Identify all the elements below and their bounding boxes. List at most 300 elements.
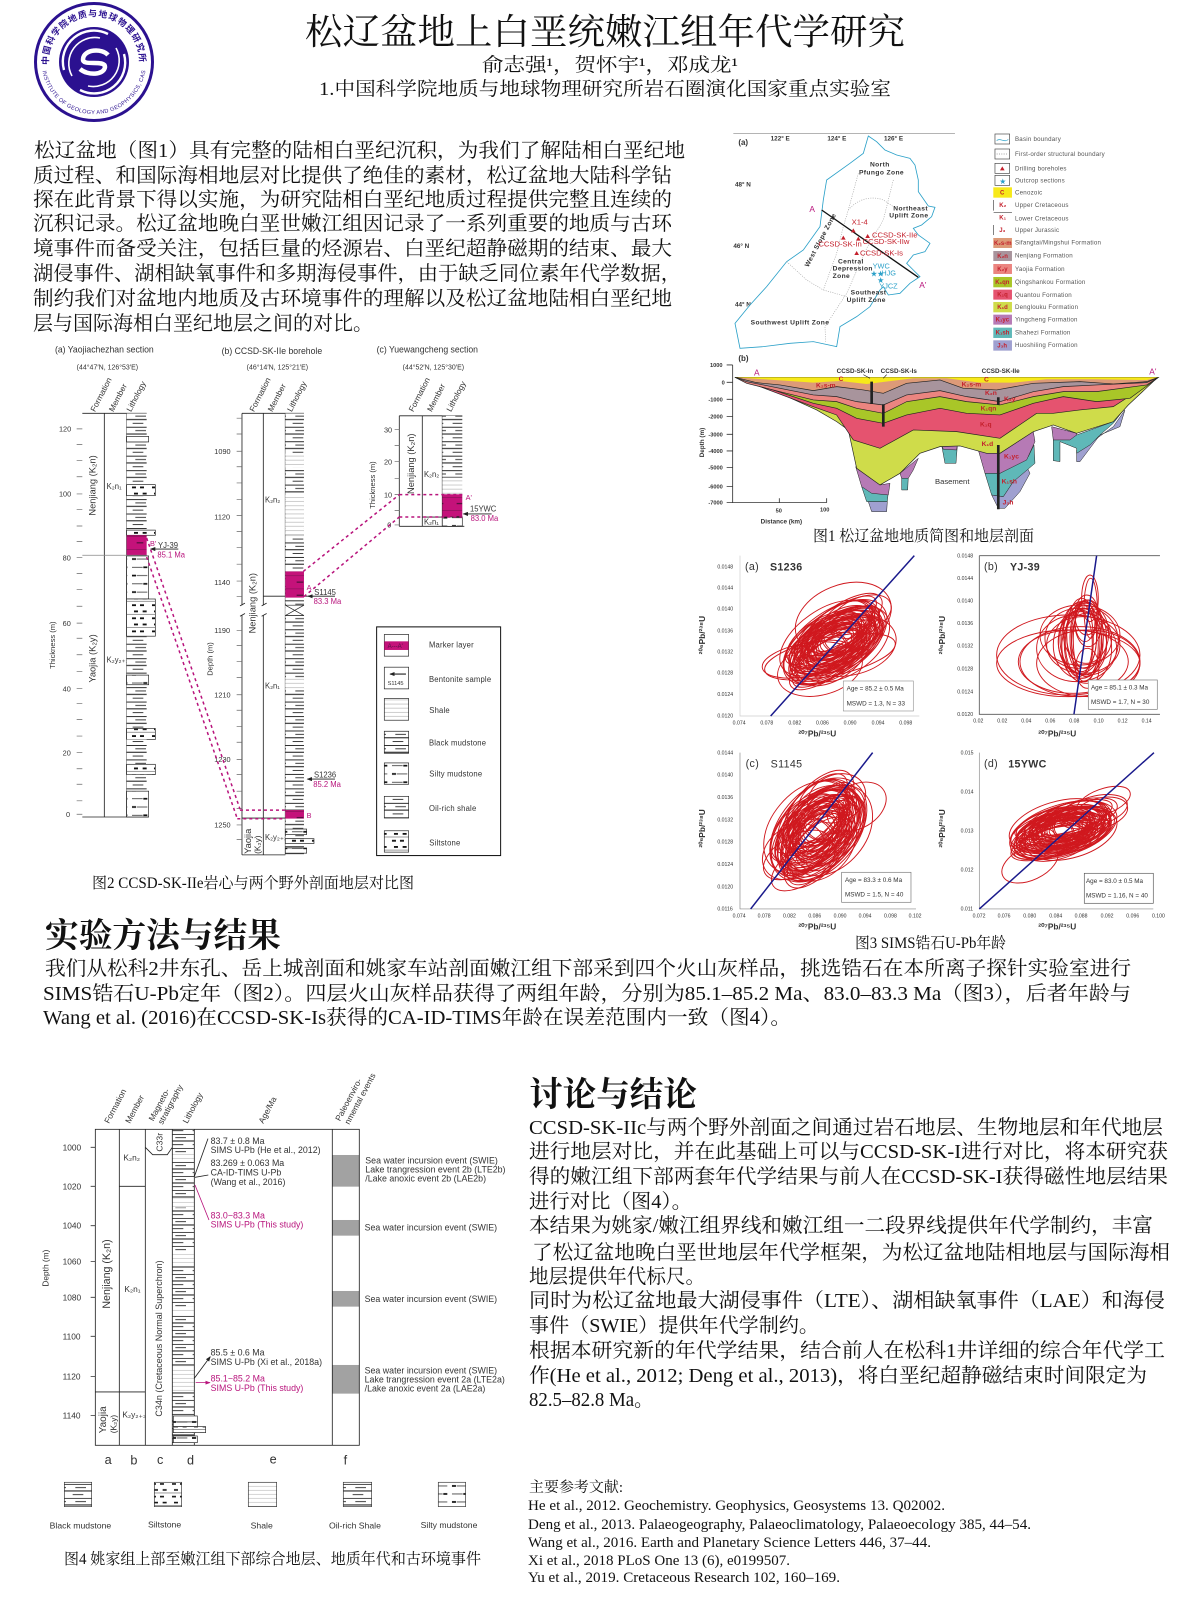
logo text: English name: INSTITUTE OF GEOLOGY AND GEOPHYSICS, CAS [42, 70, 146, 114]
discussion paragraphs: 进行地层对比，并在此基础上可以与CCSD-SK-I进行对比，将本研究获 [529, 1140, 1168, 1163]
discussion paragraphs: 作(He et al., 2012; Deng et al., 2013)，将白垩纪超静磁结束时间限定为 [529, 1364, 1147, 1387]
map legend: Denglouku Formation [1015, 304, 1079, 311]
plot d: 15YWC: (d) [984, 758, 998, 770]
section a: Yaojiachezhan: K₂n₁ [107, 482, 122, 491]
legend box: Marker layer [429, 640, 474, 650]
discussion paragraphs [529, 1116, 1170, 1411]
plot b: YJ-39: 0.04 [1021, 719, 1031, 725]
map a: YJCZ [879, 282, 898, 291]
age annotations: 83.7 ± 0.8 Ma [211, 1136, 265, 1146]
figure 4: composite stratigraphy: 1140 [63, 1411, 81, 1421]
plot c: S1145: S1145 [771, 758, 802, 770]
section a: Yaojiachezhan: YJ-39 [158, 541, 178, 550]
discussion paragraphs: 82.5–82.8 Ma。 [529, 1389, 653, 1411]
logo text: Chinese name: 中国科学院地质与地球物理研究所 [41, 9, 147, 64]
section b: CCSD-SK-IIe borehole: (46°14′N, 125°21′E) [247, 363, 308, 371]
plot a: S1236: ²⁰⁷Pb/²³⁵U [798, 729, 836, 739]
map legend: K₁sh [996, 331, 1010, 337]
plot c: S1145: 0.0132 [717, 817, 733, 823]
section c: Yuewangcheng: Lithology [445, 379, 468, 413]
legend box: Bentonite sample [429, 675, 491, 684]
geological section b: K₂s-m [962, 382, 981, 389]
map a: Northeast [893, 205, 928, 212]
geological section b: (b) [738, 354, 749, 363]
map legend: Yaojia Formation [1015, 266, 1065, 273]
map legend: C [1000, 191, 1005, 197]
map a: Central [838, 258, 864, 265]
plot b: YJ-39: 0.02 [997, 719, 1007, 725]
deep basement units [856, 406, 1127, 512]
plot d: 15YWC: 0.011 [961, 907, 973, 913]
plot d: 15YWC: 0.012 [961, 868, 974, 874]
age annotations: CA-ID-TIMS U-Pb [211, 1167, 281, 1177]
map legend: Quantou Formation [1015, 292, 1072, 299]
age annotations: SIMS U-Pb (Xi et al., 2018a) [211, 1357, 322, 1367]
age annotations: 83.269 ± 0.063 Ma [211, 1158, 284, 1168]
map a: CCSD-SK-IIe [872, 231, 918, 240]
plot b: YJ-39: Age = 85.1 ± 0.3 Ma [1091, 685, 1149, 692]
figure 4: composite stratigraphy: Magneto- [146, 1087, 172, 1123]
event labels: Lake trangression event 2a (LTE2a) [365, 1375, 505, 1385]
figure 3 caption: 图3 SIMS锆石U-Pb年龄 [855, 933, 1006, 952]
map legend: Basin boundary [1015, 136, 1062, 143]
logo: institute emblem [34, 2, 154, 122]
figure 2: stratigraphic correlation [48, 345, 501, 856]
map legend: Outcrop sections [1015, 178, 1065, 185]
map a: 122° E [771, 135, 790, 143]
map a: Southwest Uplift Zone [751, 320, 829, 327]
plot c: S1145: ²⁰⁷Pb/²³⁵U [798, 922, 836, 932]
discussion paragraphs: 本结果为姚家/嫩江组界线和嫩江组一二段界线提供年代学制约，丰富 [529, 1214, 1153, 1237]
plot b: YJ-39: 0.08 [1069, 719, 1079, 725]
plot a: S1236: 0.0144 [717, 585, 733, 591]
geological section b: 0 [722, 380, 725, 386]
section c: Yuewangcheng: 10 [384, 490, 392, 499]
geological section b: A' [1149, 367, 1157, 377]
map legend: Lower Cretaceous [1015, 216, 1069, 223]
bottom lithology legend: Oil-rich Shale [329, 1521, 381, 1531]
figure 4: composite stratigraphy: stratigraphy [156, 1082, 185, 1126]
event labels: /Lake anoxic event 2a (LAE2a) [365, 1384, 485, 1394]
section a: Yaojiachezhan: 85.1 Ma [157, 551, 186, 560]
figure 4: composite stratigraphy: Depth (m) [41, 1249, 51, 1287]
introduction paragraph: 探在此背景下得以实施，为研究陆相白垩纪地质过程提供完整且连续的 [33, 188, 672, 211]
map legend: K₁q [997, 293, 1008, 299]
geological section b: -7000 [708, 501, 723, 507]
bottom lithology legend: Shale [251, 1521, 273, 1531]
figure 4: composite stratigraphy: C33r [155, 1133, 165, 1152]
section a: Yaojiachezhan: 80 [63, 553, 71, 562]
bottom lithology legend [50, 1482, 478, 1531]
geological section b: K₁d [982, 441, 993, 448]
figure 1 caption: 图1 松辽盆地地质简图和地层剖面 [813, 526, 1034, 545]
plot c: S1145: ²⁰⁶Pb/²³⁸U [697, 809, 707, 848]
plot c: S1145: 0.098 [884, 913, 897, 919]
geological section b: K₁q [980, 422, 992, 429]
figure 3: concordia plots [697, 553, 1165, 932]
map legend: Qingshankou Formation [1015, 279, 1086, 286]
references: Deng et al., 2013. Palaeogeography, Palaeoclimatology, Palaeoecology 385, 44–54. [528, 1517, 1031, 1533]
geological section b: -6000 [708, 485, 723, 491]
section b: CCSD-SK-IIe borehole: 1120 [214, 512, 230, 521]
section b: CCSD-SK-IIe borehole: 1190 [214, 626, 230, 635]
references: 主要参考文献: [529, 1479, 623, 1496]
plot d: 15YWC: MSWD = 1.16, N = 40 [1086, 893, 1148, 900]
figure 4: composite stratigraphy: K₂n₂ [123, 1153, 140, 1163]
plot b: YJ-39: 0.02 [973, 719, 983, 725]
frame and columns [95, 1129, 359, 1445]
discussion paragraphs: 了松辽盆地晚白垩世地层年代学框架，为松辽盆地陆相地层与国际海相 [532, 1241, 1170, 1264]
figure 4: composite stratigraphy: 1000 [63, 1143, 82, 1153]
section b: CCSD-SK-IIe borehole: K₂n₂ [265, 495, 280, 505]
plot a: S1236: ²⁰⁶Pb/²³⁸U [697, 616, 707, 654]
section a: Yaojiachezhan: 100 [59, 490, 71, 499]
plot b: YJ-39: 0.06 [1045, 719, 1055, 725]
figure 4: composite stratigraphy: e [270, 1452, 277, 1466]
plot a: S1236: 0.0140 [717, 607, 733, 613]
map a: CCSD-SK-In [818, 239, 862, 248]
map a: A' [919, 280, 927, 290]
plot b: YJ-39: 0.0128 [957, 667, 973, 673]
map legend: Upper Jurassic [1015, 227, 1059, 234]
methods paragraph: 我们从松科2井东孔、岳上城剖面和姚家车站剖面嫩江组下部采到四个火山灰样品，挑选锆石在本所离子探针实验室进行 [45, 957, 1131, 980]
plot c: S1145: Age = 83.3 ± 0.6 Ma [845, 877, 903, 884]
geological section b: J₃h [1003, 499, 1013, 506]
strata layers [735, 377, 1158, 485]
map a: Depression [833, 266, 873, 273]
plot a: S1236: 0.094 [872, 721, 885, 727]
map legend [993, 134, 1106, 351]
map legend: K₁yc [996, 318, 1010, 324]
map a: HJG [881, 269, 896, 278]
section b: CCSD-SK-IIe borehole: Depth (m) [206, 642, 215, 676]
plot d: 15YWC: 0.088 [1075, 913, 1088, 919]
plot c: S1145 [697, 750, 922, 932]
discussion paragraphs: 事件（SWIE）提供年代学制约。 [529, 1314, 819, 1337]
geological section b: -4000 [708, 449, 723, 455]
introduction paragraph: 沉积记录。松辽盆地晚白垩世嫩江组因记录了一系列重要的地质与古环 [33, 212, 673, 235]
magenta correlation lines [147, 495, 465, 819]
section b: CCSD-SK-IIe borehole: Formation [248, 376, 273, 413]
figure 4: composite stratigraphy [41, 1071, 506, 1531]
plot b: YJ-39: MSWD = 1.7, N = 30 [1091, 699, 1150, 706]
map a [733, 133, 955, 348]
plot a: S1236: (a) [745, 561, 759, 573]
event labels: /Lake anoxic event 2b (LAE2b) [365, 1174, 486, 1184]
geological section b: Depth (m) [699, 428, 706, 457]
section b: CCSD-SK-IIe borehole: K₂y₂₊₃ [265, 833, 287, 842]
figure 4: composite stratigraphy: Yaojia [98, 1406, 109, 1433]
section b: CCSD-SK-IIe borehole: Yaojia [243, 828, 253, 854]
section c: Yuewangcheng: 20 [384, 457, 392, 466]
map a: YWC [873, 262, 890, 271]
section b: CCSD-SK-IIe borehole: B [307, 811, 312, 820]
methods paragraph [43, 957, 1131, 1029]
section c: Yuewangcheng: 30 [384, 425, 392, 434]
discussion paragraphs: 得的嫩江组下部两套年代学结果与前人在CCSD-SK-I获得磁性地层结果 [529, 1165, 1168, 1188]
section b: CCSD-SK-IIe borehole: Member [266, 382, 288, 413]
plot d: 15YWC: 0.092 [1101, 913, 1114, 919]
figure 4: composite stratigraphy: b [130, 1454, 137, 1468]
plot a: S1236: 0.0120 [717, 713, 733, 719]
introduction paragraph: 层与国际海相白垩纪地层之间的对比。 [33, 312, 373, 335]
section c: Yuewangcheng: A' [466, 493, 472, 502]
map a: North [870, 162, 890, 169]
section b: CCSD-SK-IIe borehole: 1210 [214, 690, 231, 700]
section a: Yaojiachezhan: Member [107, 382, 129, 413]
legend box: Oil-rich shale [429, 804, 476, 813]
section a: Yaojiachezhan: Lithology [125, 379, 148, 413]
plot b: YJ-39: 0.0144 [957, 576, 973, 582]
map a: A [809, 204, 815, 214]
figure 4: composite stratigraphy: a [105, 1453, 113, 1467]
section c: Yuewangcheng: Thickness (m) [368, 461, 377, 509]
section a: Yaojiachezhan: 20 [63, 748, 71, 757]
section a: Yaojiachezhan: (44°47′N, 126°53′E) [77, 363, 138, 371]
map legend: Upper Cretaceous [1015, 202, 1069, 209]
map a: Pfungo Zone [859, 170, 904, 177]
geological section b: K₂y [1004, 396, 1016, 403]
map a: 44° N [735, 301, 751, 309]
plot a: S1236: 0.082 [788, 721, 801, 727]
geological section b: K₁qn [981, 406, 996, 413]
section b: CCSD-SK-IIe borehole: 85.2 Ma [313, 780, 342, 789]
map legend: First-order structural boundary [1015, 151, 1106, 158]
age annotations: SIMS U-Pb (He et al., 2012) [211, 1145, 321, 1155]
event labels: Sea water incursion event (SWIE) [365, 1155, 498, 1165]
plot c: S1145: 0.094 [859, 913, 872, 919]
legend box [377, 627, 501, 856]
map a: 124° E [827, 135, 846, 143]
plot c: S1145: MSWD = 1.5, N = 40 [845, 892, 904, 899]
geological section b: -3000 [708, 432, 723, 438]
figure 4: composite stratigraphy: K₂y₂₊₃ [122, 1410, 146, 1420]
heading: methods and results: 实验方法与结果 [45, 917, 281, 955]
figure 4: composite stratigraphy: Member [123, 1093, 146, 1125]
map a: ★★ [871, 271, 884, 278]
geological section b: CCSD-SK-In [837, 368, 873, 375]
section c: Yuewangcheng: 83.0 Ma [471, 514, 499, 523]
introduction paragraph: 质过程、和国际海相地层对比提供了绝佳的素材，松辽盆地大陆科学钻 [33, 164, 672, 187]
section c: Yuewangcheng [368, 345, 499, 530]
introduction paragraph: 湖侵事件、湖相缺氧事件和多期海侵事件，由于缺乏同位素年代学数据， [33, 262, 681, 285]
map a: CCSD-SK-IIw [863, 237, 910, 246]
age annotations: SIMS U-Pb (This study) [211, 1383, 303, 1393]
map legend: K₂ [999, 203, 1007, 209]
plot a: S1236: 0.074 [733, 721, 746, 727]
plot a: S1236 [697, 556, 919, 739]
figure 1: geological map and section [699, 133, 1158, 525]
plot d: 15YWC: 0.076 [998, 913, 1011, 919]
geological section b: K₁sh [1002, 478, 1017, 485]
legend box: Silty mudstone [429, 770, 482, 779]
map a: Uplift Zone [889, 213, 928, 220]
figure 4: composite stratigraphy: (K₂y) [108, 1415, 118, 1433]
plot a: S1236: 0.0136 [717, 628, 733, 634]
map a: CCSD-SK-Is [860, 249, 903, 258]
map legend: K₁qn [995, 280, 1010, 286]
figure 4: composite stratigraphy: C34n (Cretaceous Normal Superchron) [154, 1260, 164, 1417]
introduction paragraph: 松辽盆地（图1）具有完整的陆相白垩纪沉积，为我们了解陆相白垩纪地 [34, 139, 685, 162]
map a: 48° N [735, 181, 751, 189]
bottom lithology legend: Siltstone [148, 1520, 181, 1530]
section b: CCSD-SK-IIe borehole: 1140 [214, 578, 230, 587]
geological section b: -1000 [708, 397, 723, 403]
age annotations: 85.5 ± 0.6 Ma [211, 1348, 265, 1358]
map a: X1-4 [852, 218, 869, 227]
plot d: 15YWC: ²⁰⁶Pb/²³⁸U [937, 809, 947, 848]
plot c: S1145: 0.086 [808, 913, 821, 919]
figure 4: composite stratigraphy: nmental events [342, 1071, 378, 1126]
map legend: Huoshiling Formation [1015, 342, 1078, 349]
plot a: S1236: 0.0148 [717, 564, 733, 570]
section a: Yaojiachezhan: Nenjiang (K₂n) [88, 455, 98, 516]
plot b: YJ-39: 0.0120 [957, 712, 973, 718]
section b: CCSD-SK-IIe borehole: S1236 [314, 771, 336, 780]
plot d: 15YWC [937, 750, 1165, 932]
age annotations: 85.1−85.2 Ma [211, 1374, 265, 1384]
plot d: 15YWC: 0.084 [1049, 913, 1062, 919]
geological section b: 50 [776, 509, 782, 515]
section b: CCSD-SK-IIe borehole: S1145 [314, 588, 336, 597]
figure 4: composite stratigraphy: 1040 [63, 1221, 82, 1231]
section c: Yuewangcheng: K₂n₁ [424, 517, 439, 527]
authors: 俞志强¹，贺怀宇¹，邓成龙¹ [482, 54, 738, 76]
plot a: S1236: 0.0128 [717, 671, 733, 677]
map a: Southeast [851, 290, 887, 297]
section c: Yuewangcheng: 0 [387, 521, 391, 530]
plot a: S1236: Age = 85.2 ± 0.5 Ma [847, 686, 904, 693]
section a: Yaojiachezhan: B' [150, 539, 157, 548]
map legend: K₂y [997, 267, 1008, 273]
plot b: YJ-39: 0.0124 [957, 689, 973, 695]
map legend: Shahezi Formation [1015, 330, 1071, 337]
geological section b: K₂n [985, 390, 997, 397]
age annotations: 83.0−83.3 Ma [211, 1210, 265, 1220]
plot b: YJ-39: ²⁰⁶Pb/²³⁸U [937, 616, 947, 654]
legend box: Black mudstone [429, 739, 486, 748]
section b: CCSD-SK-IIe borehole: (K₂y) [254, 835, 263, 854]
plot c: S1145: 0.0128 [717, 840, 733, 846]
plot b: YJ-39: 0.0140 [957, 598, 973, 604]
introduction paragraph [33, 139, 685, 335]
section b: CCSD-SK-IIe borehole: Nenjiang (K₂n) [248, 573, 258, 633]
section b: CCSD-SK-IIe borehole: 1090 [214, 447, 231, 456]
figure 4: composite stratigraphy: Age/Ma [256, 1095, 279, 1125]
geological section b: -5000 [708, 466, 723, 472]
figure 4: composite stratigraphy: c [157, 1453, 163, 1467]
age annotations: SIMS U-Pb (This study) [211, 1220, 303, 1230]
map legend: Cenozoic [1015, 189, 1043, 196]
methods paragraph: Wang et al. (2016)在CCSD-SK-Is获得的CA-ID-TIMS年龄在误差范围内一致（图4）。 [43, 1006, 791, 1029]
geological section b [699, 354, 1158, 525]
plot c: S1145: 0.074 [733, 913, 746, 919]
geological section b: K₂s-m [816, 383, 836, 390]
plot b: YJ-39: ²⁰⁷Pb/²³⁵U [1038, 729, 1076, 739]
plot b: YJ-39: 0.14 [1142, 719, 1152, 725]
section a: Yaojiachezhan: 120 [59, 424, 71, 434]
plot c: S1145: 0.0124 [717, 862, 733, 868]
section c: Yuewangcheng: (c) Yuewangcheng section [377, 345, 478, 355]
plot d: 15YWC: 0.015 [961, 750, 974, 756]
geological section b: Distance (km) [761, 518, 802, 525]
plot a: S1236: 0.0132 [717, 649, 733, 655]
section a: Yaojiachezhan: (a) Yaojiachezhan section [55, 345, 154, 355]
map legend: K₂n [997, 254, 1008, 260]
section c: Yuewangcheng: K₂n₂ [424, 470, 439, 479]
geological section b: C [984, 377, 989, 384]
figure 4: composite stratigraphy: Paleoenviro- [333, 1076, 364, 1123]
section b: CCSD-SK-IIe borehole: Lithology [286, 379, 309, 413]
discussion paragraphs: CCSD-SK-IIc与两个野外剖面之间通过岩石地层、生物地层和年代地层 [529, 1116, 1163, 1139]
plot b: YJ-39 [937, 553, 1160, 739]
event labels: Sea water incursion event (SWIE) [365, 1365, 497, 1375]
references: Wang et al., 2016. Earth and Planetary Science Letters 446, 37–44. [528, 1535, 931, 1551]
geological section b: -2000 [708, 415, 723, 421]
map legend: J₃ [999, 228, 1006, 234]
map a: ★ [877, 277, 884, 284]
section a: Yaojiachezhan: Formation [89, 376, 114, 413]
figure 2 caption: 图2 CCSD-SK-IIe岩心与两个野外剖面地层对比图 [92, 873, 414, 892]
map legend: K₂s-m [994, 241, 1012, 247]
figure 4: composite stratigraphy: 1020 [63, 1181, 82, 1191]
discussion paragraphs: 根据本研究新的年代学结果，结合前人在松科1井详细的综合年代学工 [529, 1339, 1165, 1362]
map a: (a) [738, 138, 748, 147]
title: 松辽盆地上白垩统嫩江组年代学研究 [305, 12, 905, 52]
legend box: Siltstone [429, 838, 460, 848]
plot c: S1145: 0.0120 [717, 884, 733, 890]
figure 4: composite stratigraphy: Lithology [180, 1090, 205, 1125]
plot a: S1236: S1236 [770, 561, 802, 573]
section b: CCSD-SK-IIe borehole: 1230 [214, 755, 231, 764]
plot b: YJ-39: 0.0132 [957, 644, 973, 650]
plot b: YJ-39: 0.12 [1118, 719, 1128, 725]
map legend: Sifangtai/Mingshui Formation [1015, 240, 1102, 247]
map a: Uplift Zone [847, 297, 886, 304]
map a: West Slope Zone [804, 212, 838, 268]
plot c: S1145: 0.090 [834, 913, 847, 919]
event labels [365, 1155, 506, 1394]
plot d: 15YWC: Age = 83.0 ± 0.5 Ma [1086, 878, 1144, 885]
plot d: 15YWC: 0.100 [1152, 913, 1165, 919]
geological section b: 100 [820, 508, 829, 514]
map legend: ★ [1000, 178, 1007, 185]
bottom lithology legend: Black mudstone [50, 1521, 111, 1531]
plot a: S1236: 0.078 [760, 721, 773, 727]
geological section b: A [754, 367, 760, 377]
plot b: YJ-39: 0.0136 [957, 621, 973, 627]
figure 4: composite stratigraphy: 1080 [63, 1292, 82, 1302]
references: Xi et al., 2018 PLoS One 13 (6), e0199507. [528, 1553, 790, 1569]
figure 4 caption: 图4 姚家组上部至嫩江组下部综合地层、地质年代和古环境事件 [64, 1549, 481, 1568]
references: Yu et al., 2019. Cretaceous Research 102, 160–169. [528, 1570, 840, 1586]
section a: Yaojiachezhan [48, 345, 186, 819]
plot a: S1236: 0.086 [816, 721, 829, 727]
geological section b: K₁yc [1004, 453, 1019, 460]
plot b: YJ-39: YJ-39 [1010, 561, 1040, 573]
section b: CCSD-SK-IIe borehole: K₂n₁ [265, 681, 280, 691]
figure 4: composite stratigraphy: f [344, 1454, 348, 1468]
map legend: K₁ [999, 216, 1007, 222]
geological section b: CCSD-SK-IIe [982, 368, 1020, 375]
plot c: S1145: 0.0144 [717, 750, 733, 756]
legend box: S1145 [388, 681, 404, 687]
section c: Yuewangcheng: Nenjiang (K₂n) [406, 434, 416, 494]
legend box: Shale [429, 706, 450, 715]
plot c: S1145: 0.102 [909, 913, 922, 919]
section c: Yuewangcheng: Member [426, 382, 447, 413]
event labels: Lake trangression event 2b (LTE2b) [365, 1165, 506, 1175]
